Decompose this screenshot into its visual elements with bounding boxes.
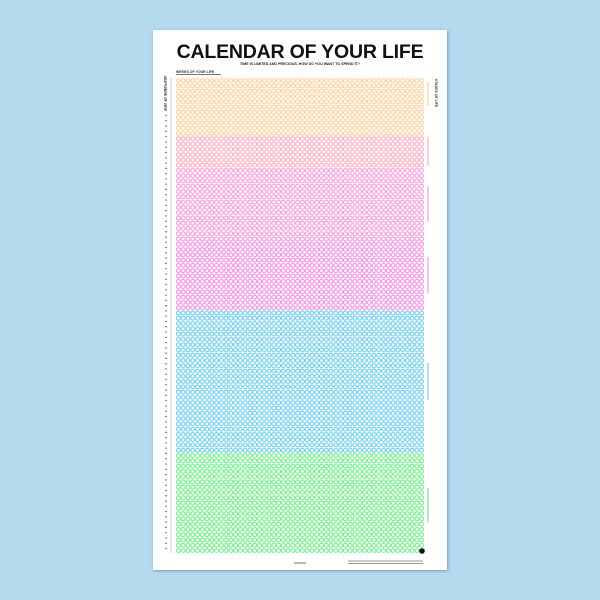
title: CALENDAR OF YOUR LIFE [177,41,423,63]
right vertical label: STAGES OF LIFE [434,79,438,107]
left vertical label: AGE YEARS OF LIFE [163,76,167,110]
footer [294,561,423,564]
weeks label: WEEKS OF YOUR LIFE [176,70,214,74]
subtitle: TIME IS LIMITED AND PRECIOUS. HOW DO YOU WANT TO SPEND IT? [240,62,360,66]
poster [153,30,447,570]
stage markers [427,82,429,522]
weeks label [176,70,221,75]
end dot [419,548,425,554]
left axis [166,78,171,553]
